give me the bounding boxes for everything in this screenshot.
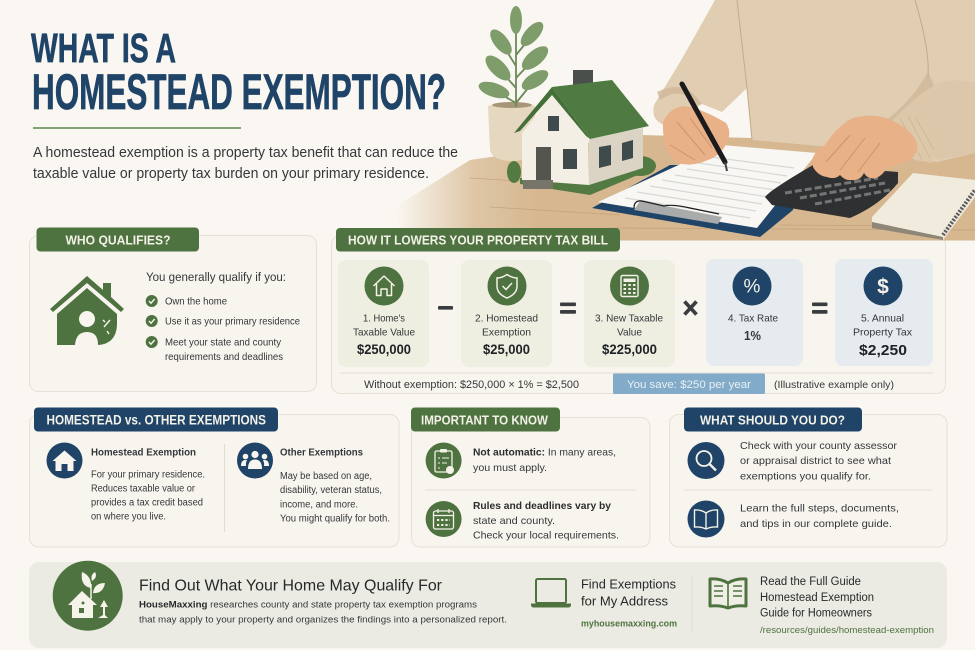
typing hand: [812, 116, 917, 180]
hero illustration: [395, 0, 975, 240]
heading tab: who qualifies: WHO QUALIFIES?: [66, 234, 170, 248]
icon: people: [237, 442, 273, 478]
disclaimer: (Illustrative example only): [774, 379, 894, 391]
card 3 new taxable value: $225,000: [602, 342, 657, 357]
card 4 tax rate: [706, 259, 803, 366]
intro text: [33, 145, 458, 182]
footer body text: [139, 600, 507, 626]
not automatic text: [473, 447, 616, 474]
icon: open guide book: [710, 579, 746, 608]
heading tab: HOMESTEAD vs. OTHER EXEMPTIONS: [46, 412, 266, 428]
rules text: Check your local requirements.: [473, 530, 619, 542]
check assessor text: exemptions you qualify for.: [740, 470, 871, 482]
writing hand and pen: [663, 84, 729, 171]
icon: clipboard: [426, 442, 462, 478]
other exemptions text: May be based on age,: [280, 471, 372, 482]
read the guide link: [760, 576, 934, 636]
footer body text: that may apply to your property and organizes the findings into a personalized report.: [139, 615, 507, 626]
heading tab: IMPORTANT TO KNOW: [421, 414, 548, 428]
icon: house: [46, 442, 82, 478]
heading tab: how it lowers: [336, 228, 620, 252]
homestead text: on where you live.: [91, 511, 166, 522]
comparison line: Without exemption: $250,000 × 1% = $2,500: [364, 379, 579, 391]
heading tab: how it lowers: HOW IT LOWERS YOUR PROPERTY TAX BILL: [348, 232, 608, 248]
read the guide link: Homestead Exemption: [760, 592, 874, 604]
footer heading: Find Out What Your Home May Qualify For: [139, 578, 443, 595]
multiply sign: [684, 302, 696, 314]
heading tab: [34, 408, 278, 432]
card 4 tax rate: 4. Tax Rate: [728, 313, 778, 325]
icon: open book: [688, 500, 724, 538]
homestead text: Reduces taxable value or: [91, 484, 196, 495]
checklist: Own the home: [165, 296, 227, 308]
card 4 tax rate: 1%: [744, 328, 761, 343]
qualify text: You generally qualify if you:: [146, 270, 286, 284]
other exemptions text: You might qualify for both.: [280, 514, 390, 525]
guide text: Learn the full steps, documents,: [740, 503, 899, 515]
heading tab: [684, 408, 862, 432]
title: [31, 25, 446, 120]
read the guide link: /resources/guides/homestead-exemption: [760, 625, 934, 636]
checklist: requirements and deadlines: [165, 351, 283, 363]
find exemptions link: Find Exemptions: [581, 577, 676, 591]
card 4 tax rate: %: [744, 276, 761, 298]
other exemptions text: [280, 448, 390, 525]
check assessor text: or appraisal district to see what: [740, 455, 891, 467]
heading tab: WHAT SHOULD YOU DO?: [700, 414, 845, 428]
panel: what should you do: [670, 408, 947, 547]
equals sign: [560, 302, 576, 314]
card 2 exemption: $25,000: [483, 342, 530, 357]
checklist: [146, 295, 300, 363]
equals sign: [812, 302, 828, 314]
other exemptions text: income, and more.: [280, 499, 358, 510]
card 2 exemption: [461, 260, 552, 367]
person sweater: [653, 0, 975, 163]
paperwork on clipboard: [592, 145, 817, 237]
check assessor text: [740, 440, 898, 482]
card 2 exemption: Exemption: [482, 326, 531, 338]
panel: homestead vs other exemptions: [30, 408, 399, 547]
intro text: A homestead exemption is a property tax benefit that can reduce the: [33, 145, 458, 161]
icon: laptop: [531, 579, 571, 608]
icon: house with person: [50, 276, 124, 345]
icon: house with sprout: [53, 561, 123, 631]
panel: how it lowers your tax bill: [332, 236, 946, 394]
table: [395, 135, 975, 240]
panel: who qualifies: [30, 236, 316, 392]
homestead text: [91, 448, 205, 522]
find exemptions link: myhousemaxxing.com: [581, 619, 677, 629]
card 5 annual tax: $: [877, 276, 889, 298]
guide text: [740, 503, 899, 530]
card 1 home value: [338, 260, 429, 367]
card 5 annual tax: Property Tax: [853, 326, 913, 338]
card 3 new taxable value: [584, 260, 675, 367]
icon: calculator: [765, 165, 898, 218]
other exemptions text: disability, veteran status,: [280, 485, 382, 496]
check assessor text: Check with your county assessor: [740, 440, 898, 452]
rules text: [473, 500, 619, 542]
card 1 home value: $250,000: [357, 342, 411, 357]
icon: model house: [507, 70, 656, 195]
icon: notebook: [872, 173, 975, 240]
guide text: and tips in our complete guide.: [740, 518, 892, 530]
card 3 new taxable value: 3. New Taxable: [595, 313, 663, 325]
card 1 home value: 1. Home's: [363, 313, 405, 325]
card 5 annual tax: 5. Annual: [861, 313, 904, 325]
checklist: Use it as your primary residence: [165, 316, 300, 328]
title: WHAT IS A: [31, 25, 176, 71]
heading tab: [411, 408, 560, 432]
card 1 home value: Taxable Value: [353, 326, 415, 338]
intro text: taxable value or property tax burden on your primary residence.: [33, 166, 429, 182]
panel: important to know: [411, 408, 650, 547]
homestead text: For your primary residence.: [91, 470, 205, 481]
other exemptions text: Other Exemptions: [280, 448, 363, 459]
not automatic text: Not automatic: In many areas,: [473, 447, 616, 459]
heading tab: who qualifies: [36, 228, 199, 252]
checklist: Meet your state and county: [165, 336, 282, 348]
find exemptions link: [581, 577, 677, 629]
rules text: Rules and deadlines vary by: [473, 500, 611, 512]
card 5 annual tax: $2,250: [859, 342, 907, 359]
savings callout: [613, 374, 765, 394]
icon: plant: [477, 6, 552, 161]
icon: calendar: [426, 501, 462, 537]
rules text: state and county.: [473, 515, 555, 527]
homestead text: provides a tax credit based: [91, 498, 203, 509]
card 5 annual tax: [835, 259, 933, 366]
savings callout: You save: $250 per year: [627, 379, 751, 391]
card 2 exemption: 2. Homestead: [475, 313, 538, 325]
title: HOMESTEAD EXEMPTION?: [32, 64, 446, 120]
icon: magnifier: [688, 442, 724, 479]
minus sign: [438, 306, 453, 310]
read the guide link: Read the Full Guide: [760, 576, 861, 588]
not automatic text: you must apply.: [473, 462, 547, 474]
find exemptions link: for My Address: [581, 595, 668, 609]
footer body text: HouseMaxxing researches county and state property tax exemption programs: [139, 600, 477, 611]
homestead text: Homestead Exemption: [91, 448, 196, 459]
read the guide link: Guide for Homeowners: [760, 608, 872, 620]
panel: footer call to action: [29, 561, 947, 648]
card 3 new taxable value: Value: [617, 326, 642, 338]
